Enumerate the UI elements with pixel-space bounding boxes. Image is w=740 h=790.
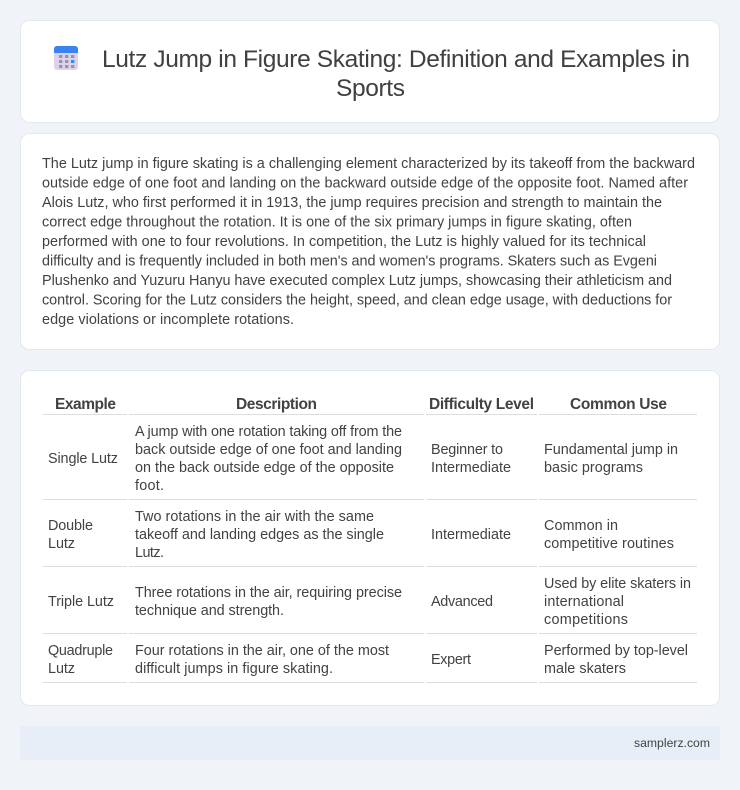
title: Sports [336,75,405,102]
text block: definition paragraph: The Lutz jump in figure skating is a challenging element characterized by its takeoff from the backward [42,156,695,172]
table row: single lutz [43,424,697,500]
table header: Common Use [570,396,667,413]
table row: triple lutz [43,576,697,634]
table row: double lutz: Lutz. [135,545,164,561]
table row: double lutz: Common in [544,518,618,534]
title [102,46,690,102]
table row: triple lutz: Used by elite skaters in [544,576,691,592]
table row: triple lutz: international [544,594,624,610]
table header: Description [236,396,317,413]
table row: double lutz [43,509,697,567]
table row: single lutz: Intermediate [431,460,511,476]
table row: triple lutz: competitions [544,612,628,628]
table row: single lutz: on the back outside edge of the opposite [135,460,394,476]
table row: single lutz: Fundamental jump in [544,442,678,458]
table header [43,396,697,415]
panel: introduction text [20,134,720,350]
table row: double lutz: takeoff and landing edges as the single [135,527,384,543]
table header: Example [55,396,116,413]
panel: examples table [20,370,720,706]
table row: triple lutz: Three rotations in the air, requiring precise [135,585,402,601]
text block: definition paragraph: Plushenko and Yuzuru Hanyu have executed complex Lutz jumps, showcasing their athleticism and [42,273,672,289]
table row: triple lutz: Advanced [431,594,493,610]
table row: quadruple lutz: Lutz [48,661,75,677]
icon: calendar [54,46,78,70]
table row: quadruple lutz [43,643,697,683]
text block: definition paragraph: difficulty and is frequently included in both men's and women's programs. Skaters such as Evgeni [42,254,657,270]
table header: Difficulty Level [429,396,534,413]
text block: definition paragraph: outside edge of one foot and landing on the backward outside edge of the opposite foot. Named after [42,176,688,192]
table row: quadruple lutz: Quadruple [48,643,113,659]
panel: title card [20,20,720,122]
text block: definition paragraph: Alois Lutz, who first performed it in 1913, the jump requires precision and strength to maintain the [42,195,662,211]
table row: single lutz: foot. [135,478,164,494]
table row: double lutz: Double [48,518,93,534]
table row: quadruple lutz: difficult jumps in figure skating. [135,661,333,677]
table row: single lutz: Single Lutz [48,451,118,467]
table row: quadruple lutz: Four rotations in the air, one of the most [135,643,389,659]
table row: quadruple lutz: Performed by top-level [544,643,688,659]
title: Lutz Jump in Figure Skating: Definition and Examples in [102,46,690,73]
text block: definition paragraph: control. Scoring for the Lutz considers the height, speed, and clean edge usage, with deductions for [42,292,672,308]
table row: single lutz: basic programs [544,460,643,476]
table row: quadruple lutz: Expert [431,652,471,668]
text block: definition paragraph: correct edge throughout the rotation. It is one of the six primary jumps in figure skating, often [42,214,632,230]
table row: single lutz: Beginner to [431,442,503,458]
text block: definition paragraph: edge violations or incomplete rotations. [42,312,294,328]
table row: quadruple lutz: male skaters [544,661,626,677]
table row: single lutz: back outside edge of one foot and landing [135,442,402,458]
text block: definition paragraph: performed with one to four revolutions. In competition, the Lutz is highly valued for its technical [42,234,646,250]
table row: double lutz: Intermediate [431,527,511,543]
table row: double lutz: Two rotations in the air with the same [135,509,374,525]
footer bar [20,726,720,760]
text block: definition paragraph [42,156,695,328]
footer source text: samplerz.com [634,736,710,750]
table row: single lutz: A jump with one rotation taking off from the [135,424,402,440]
table row: double lutz: Lutz [48,536,75,552]
table row: double lutz: competitive routines [544,536,674,552]
table row: triple lutz: Triple Lutz [48,594,114,610]
table row: triple lutz: technique and strength. [135,603,284,619]
